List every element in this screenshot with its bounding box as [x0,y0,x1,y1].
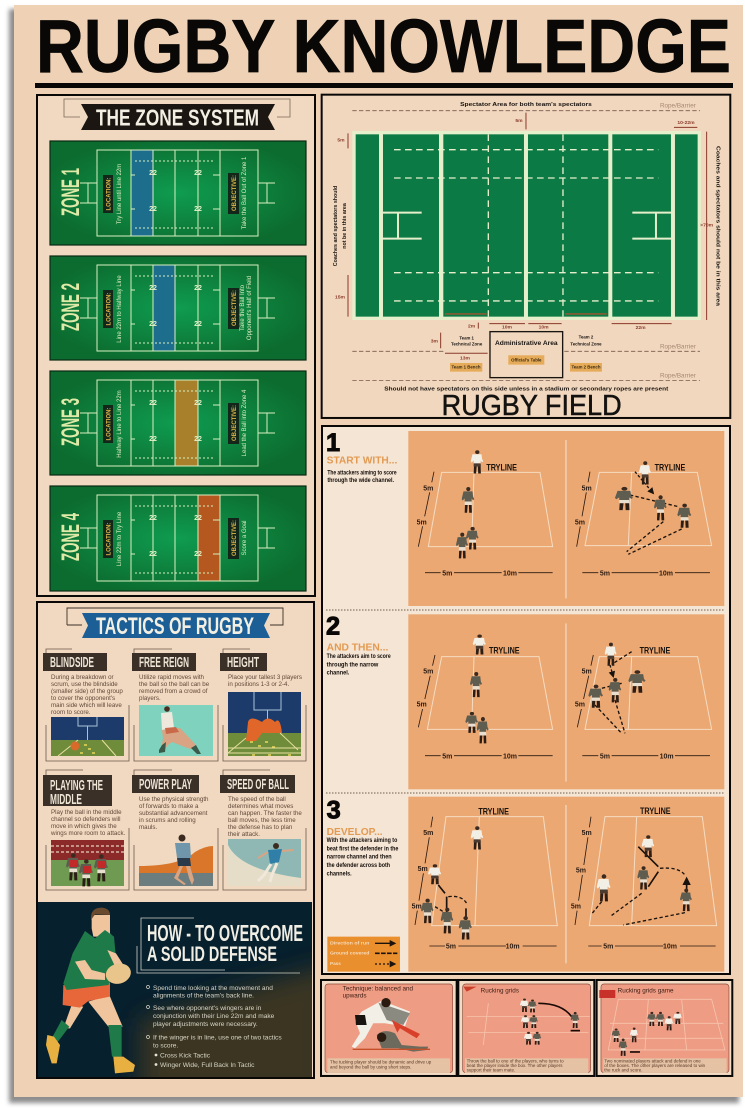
drill 2: 5m [417,702,427,709]
drill 3: 10m [506,944,520,951]
bottom panel: rucking grids game: the ruck and score. [604,1068,642,1073]
card: speed of ball: SPEED OF BALL [227,777,289,793]
card: speed of ball [220,775,302,886]
drill 2: 5m [442,753,452,760]
card: blindside: scrum, use the blindside [51,681,118,688]
card: free reign: the ball so the ball can be [139,681,210,688]
zone 1: 22 [149,206,157,213]
zone 1: OBJECTIVE: [231,175,238,211]
zone 2: LOCATION: [106,292,112,326]
card: blindside: to cover the opponent's [51,695,115,702]
illustration: rucking players [352,998,430,1052]
bottom panel: technique: The tucking player should be dynamic and drive up [330,1060,432,1065]
bullet list: alignments of the team's back line. [153,992,254,1000]
bullet list [146,985,282,1069]
drill 1: 5m [417,519,427,526]
drill 1: 5m [600,570,610,577]
image: power play [139,834,213,886]
rope labels [660,103,696,380]
image: free reign tackle [139,705,213,756]
team 1 bench: Team 1 Bench [451,365,481,370]
title rule [35,83,733,88]
drill 2: through the narrow [327,661,378,668]
heading frame [137,918,300,973]
heading: rugby field: RUGBY FIELD [442,390,622,422]
card: height: Place your tallest 3 players [228,674,302,681]
card: height: in positions 1-3 or 2-4. [228,681,290,688]
heading: tactics of rugby banner: TACTICS OF RUGBY [96,613,254,640]
drill 2: AND THEN... [327,642,389,653]
bullet list: to score. [153,1042,178,1050]
card: free reign [132,653,213,756]
panel: rugby field: >70m [700,223,714,229]
card: free reign: Utilize rapid moves with [139,674,205,681]
zone 4: LOCATION: [106,522,112,556]
bottom panel: rucking grids game: Rucking grids game [618,987,674,994]
image: height lineout [228,692,301,756]
spectator label: Spectator Area for both team's spectators [460,102,592,108]
bullet list: player adjustments were necessary. [153,1021,258,1028]
panel: rugby field: 10m [539,325,549,331]
zone 3 [50,371,306,475]
stadium backdrop [128,958,312,1077]
drill 1: 10m [659,570,673,577]
drill 3: 5m [582,830,592,837]
card: speed of ball: the defense has to plan [228,824,293,831]
bottom panel: rucking grids [458,980,594,1076]
measurement marks [348,113,707,353]
legend: Pass [330,961,341,966]
left side note: Coaches and spectators should [333,186,339,266]
bullet list: Spend time looking at the movement and [153,985,273,992]
panel: the zone system [37,95,315,596]
image: playing the middle [51,840,124,886]
rope labels: Rope/Barrier [660,103,696,110]
drill 1: TRYLINE [486,463,517,473]
panel: rugby field: 13m [460,355,471,361]
bottom panel: technique: upwards [343,992,367,999]
legend [327,937,400,972]
card: power play [132,775,213,886]
team 1 technical zone: Technical Zone [451,341,483,346]
card: blindside: room to score. [51,709,91,716]
zone 4: 22 [149,515,157,522]
panel: how-to overcome a solid defense [38,902,330,1100]
right side note: Coaches and spectators should not be in this area [715,146,721,306]
bottom panel: technique: Technique: balanced and [343,985,414,992]
team 2 technical zone: Technical Zone [570,341,602,346]
bottom note: Should not have spectators on this side unless in a stadium or secondary ropes are present [384,386,669,392]
zone 3: Halfway Line to Line 22m [117,390,123,458]
zone 3: ZONE 3 [57,398,85,446]
legend: Direction of run [330,941,369,946]
drill 2: 5m [575,702,585,709]
panel: rugby field: 22m [636,325,646,331]
zone 2: 22 [149,321,157,328]
panel: rugby field: 5m [515,118,523,124]
zone 1: ZONE 1 [57,168,85,216]
card: height [220,653,302,756]
card: power play: in scrums and rolling [139,817,196,824]
drill 2: 10m [660,753,674,760]
card: speed of ball: The speed of the ball [228,796,286,803]
card: speed of ball: can happen. The faster the [228,810,302,817]
zone 1 [50,141,306,245]
heading: how-to overcome: HOW - TO OVERCOME [147,920,303,946]
left side note [333,186,348,266]
zone 4 [50,486,306,591]
drill 2: 2 [326,612,340,640]
panel: rugby field: 2m [468,324,476,330]
bottom panel: technique: and beyond the ball by using short steps. [330,1065,412,1070]
zone 3: OBJECTIVE: [231,405,238,441]
card: power play: Use the physical strength [139,796,209,803]
rope barrier lines [352,111,700,381]
image: blindside goalposts [51,717,124,756]
bottom panel: rucking grids: Rucking grids [481,987,519,994]
administrative area: Administrative Area [495,340,558,347]
zone 2: ZONE 2 [57,283,85,331]
bullet list: Cross Kick Tactic [160,1052,211,1060]
drill 2 [326,612,724,789]
bullet list: If the winger is in line, use one of two tactics [153,1034,282,1042]
panel: rugby field: 3m [431,338,438,344]
team 2 bench: Team 2 Bench [571,365,601,370]
drill 3: 5m [446,944,456,951]
zone 1: LOCATION: [106,178,112,210]
left side note: not be in this area [342,203,348,249]
zone 3: LOCATION: [106,408,112,440]
bullet list: conjunction with their Line 22m and make [153,1013,275,1020]
panel: rugby field: 10m [502,325,513,331]
drill 3: DEVELOP... [327,827,383,838]
administrative area: Official's Table [511,357,542,362]
zone 4: 22 [149,551,157,558]
drill 1 [326,429,724,606]
drill 1: START WITH... [327,456,398,467]
heading: tactics of rugby banner [82,613,270,640]
card frames [46,649,306,890]
card: blindside: (smaller side) of the group [51,688,123,695]
bottom panel: rucking grids: beat the player inside the box. The other players [467,1063,563,1068]
drill 2: TRYLINE [640,646,670,656]
card: speed of ball: ball moves, the less time [228,817,296,824]
drill 3: narrow channel and then [327,854,392,861]
drill 3: 5m [603,944,613,951]
drill 3: 5m [423,830,433,837]
rugby pitch [352,131,701,320]
drill 3: channels. [327,870,352,877]
card: blindside: BLINDSIDE [50,655,94,671]
drill 1: 5m [442,570,452,577]
card: blindside [43,653,124,756]
administrative area [490,332,563,378]
card: free reign: FREE REIGN [139,655,189,671]
card: playing the middle: MIDDLE [50,792,82,808]
heading: the zone system banner: THE ZONE SYSTEM [96,104,259,130]
card: free reign: removed from a crowd of [139,688,208,695]
drill 3: 5m [571,903,581,910]
drill 2: channel. [327,670,350,677]
card: power play: POWER PLAY [139,777,192,793]
zone 2 [50,256,306,360]
bottom panel: rucking grids game: Two nominated players attack and defend in one [604,1058,701,1063]
rope labels: Rope/Barrier [660,343,696,350]
drill 3: 5m [576,868,586,875]
drill 1: The attackers aiming to score [327,469,397,476]
team 1 technical zone [451,335,483,346]
zone 3: 22 [149,436,157,443]
card: playing the middle: wings more room to attack. [50,830,126,837]
card: power play: of forwards to make a [139,803,199,810]
bullet list: See where opponent's wingers are in [153,1005,262,1012]
bottom panel: technique [321,980,457,1076]
card: playing the middle: Play the ball in the middle [51,809,122,816]
drill 3: 5m [418,866,428,873]
panel: rugby field: 10-22m [677,120,695,126]
drill 3: 3 [327,796,341,824]
panel: rugby field: 15m [335,294,346,300]
card: speed of ball: their attack. [228,831,260,838]
zone 2: 22 [149,285,157,292]
zone 4: OBJECTIVE: [231,520,238,556]
drill 1: 5m [575,519,585,526]
zone 3: Lead the Ball into Zone 4 [242,389,248,456]
zone 1: 22 [194,206,202,213]
team 2 technical zone: Team 2 [579,335,594,340]
panel: rugby field [322,95,730,422]
zone 2: OBJECTIVE: [231,290,238,326]
drill 3: beat first the defender in the [327,845,399,852]
team 1 technical zone: Team 1 [459,335,475,340]
zone 1: 22 [149,170,157,177]
rope labels: Rope/Barrier [660,373,696,380]
card: free reign: players. [139,695,161,702]
drill 2: 10m [503,753,517,760]
bullet list: Winger Wide, Full Back In Tactic [160,1062,255,1069]
zone 4: Line 22m to Try Line [117,511,123,566]
drill 3: 5m [412,903,422,910]
drill 1: through the wide channel. [327,477,394,484]
drill 3: With the attackers aiming to [327,837,397,844]
card: playing the middle: move in which gives the [51,823,117,830]
zone 2: 22 [194,285,202,292]
drill 1: TRYLINE [655,463,685,473]
zone 1: 22 [194,170,202,177]
drill 2: The attackers aim to score [327,653,391,660]
zone 3: 22 [149,400,157,407]
drill 1: 10m [503,570,517,577]
panel: rugby field: 5m [337,137,345,143]
drill 2: TRYLINE [489,646,520,656]
zone 4: 22 [194,551,202,558]
zone 2: Opponent's Half of Field [247,276,253,340]
bottom panel: rucking grids game [597,980,732,1076]
card: blindside: During a breakdown or [51,674,114,681]
drill 3: TRYLINE [478,806,509,816]
zone 1: Try Line until Line 22m [117,164,123,224]
zone 4: Score a Goal [242,520,248,556]
drill 1: 1 [326,429,340,457]
image: speed of ball [228,839,301,886]
drill 3: 10m [663,944,677,951]
zone 2: Take the Ball Into [240,284,246,331]
drill 1: 5m [582,485,592,492]
heading: a solid defense: A SOLID DEFENSE [147,942,277,966]
bottom panel: rucking grids: Throw the ball to one of the players, who turns to [467,1058,564,1063]
zone 1: Take the Ball Out of Zone 1 [242,156,248,229]
drill 3: the defender across both [327,862,390,869]
drill 1: 5m [423,485,433,492]
zone 4: 22 [194,515,202,522]
card: height: HEIGHT [227,655,259,671]
illustration: rucking grid players [520,998,580,1045]
bottom panel: rucking grids: support their team mate. [467,1068,515,1073]
team 1 bench [450,363,482,372]
zone 4: ZONE 4 [57,513,85,561]
drill 3: TRYLINE [640,806,671,816]
drill 2: 5m [600,753,610,760]
team 2 bench [570,363,602,372]
card: blindside: main side which will leave [51,702,122,709]
drill 3 [327,796,724,972]
zone 3: 22 [194,436,202,443]
illustration: rucking game players [612,1012,682,1056]
bottom panel: rucking grids game: of the boxes. The other players are released to win [604,1063,706,1068]
card: speed of ball: determines what moves [228,803,293,810]
card: power play: substantial advancement [139,810,208,817]
card: playing the middle: PLAYING THE [50,778,103,794]
panel: drills [322,426,730,974]
zone 2: Line 22m to Halfway Line [117,275,123,343]
card: playing the middle: channel so defenders will [51,816,120,823]
drill 2: 5m [582,668,592,675]
zone 3: 22 [194,400,202,407]
zone 2: 22 [194,321,202,328]
drill 2: 5m [423,668,433,675]
icon: rugby player running with ball [46,908,135,1073]
card: playing the middle [43,775,126,886]
card: power play: mauls. [139,824,158,831]
legend: Ground covered [330,951,369,956]
team 2 technical zone [570,335,602,346]
